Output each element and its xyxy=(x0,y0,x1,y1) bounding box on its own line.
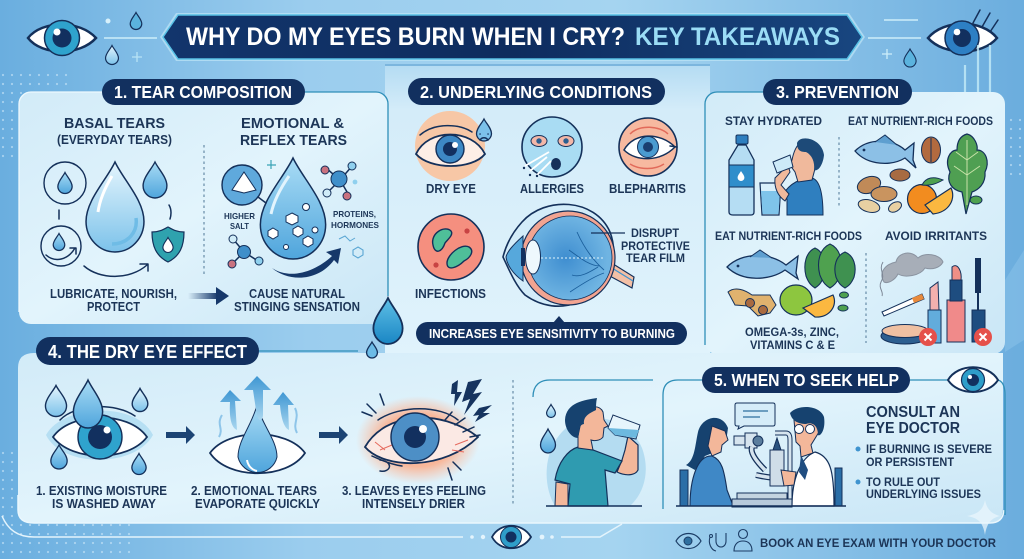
callout line xyxy=(591,232,625,234)
icon: allergies xyxy=(522,117,582,177)
panel: underlying conditions xyxy=(385,65,710,358)
title banner xyxy=(160,13,865,61)
label: avoid irritants: AVOID IRRITANTS xyxy=(885,229,987,243)
illustration: tears evaporate eye xyxy=(210,376,305,473)
bullet: severe or persistent xyxy=(856,442,992,469)
footer icons xyxy=(676,530,752,551)
text: lubricate, nourish, protect: LUBRICATE, NOURISH, xyxy=(50,287,177,301)
text: cause natural stinging sensation xyxy=(234,287,360,314)
illustration: person drinking water xyxy=(541,398,646,506)
label: dry eye: DRY EYE xyxy=(426,182,476,196)
text: cause natural stinging sensation: STINGING SENSATION xyxy=(234,300,360,314)
text: eyes feel drier xyxy=(342,484,486,511)
label: eat nutrient-rich foods 2: EAT NUTRIENT-RICH FOODS xyxy=(715,229,862,243)
diagram: eye anatomy xyxy=(503,204,634,306)
heading: consult an eye doctor: EYE DOCTOR xyxy=(866,420,960,437)
illustration: eye doctor exam xyxy=(676,403,846,507)
connector to tear drop xyxy=(259,350,358,352)
label: allergies: ALLERGIES xyxy=(520,182,584,196)
bullet: severe or persistent: OR PERSISTENT xyxy=(866,455,955,469)
arrow: step 2 to 3 xyxy=(319,426,348,444)
illustration: fish, greens and citrus xyxy=(727,244,855,317)
banner: increases eye sensitivity: INCREASES EYE SENSITIVITY TO BURNING xyxy=(429,327,675,341)
bullet: rule out issues: TO RULE OUT xyxy=(866,475,941,489)
label: proteins, hormones: PROTEINS, xyxy=(333,209,376,219)
panel 5 outline xyxy=(663,380,1005,515)
panel: prevention xyxy=(705,79,1005,354)
label: proteins, hormones xyxy=(331,209,379,230)
icon: infections xyxy=(418,214,484,280)
illustration: emotional tears xyxy=(222,158,363,278)
illustration: fish, nuts and spinach xyxy=(855,134,987,215)
illustration: avoid irritants xyxy=(880,253,992,346)
text: emotional tears evaporate: EVAPORATE QUICKLY xyxy=(195,497,321,511)
heading: emotional and reflex tears: EMOTIONAL & xyxy=(241,116,345,132)
text: omega-3s, zinc, vitamins: VITAMINS C & E xyxy=(750,338,835,352)
banner: increases eye sensitivity xyxy=(416,316,687,345)
callout: disrupt protective tear film: PROTECTIVE xyxy=(621,239,690,253)
icon: footer eye xyxy=(492,526,531,548)
title text: WHY DO MY EYES BURN WHEN I CRY? xyxy=(186,23,625,51)
text: emotional tears evaporate: 2. EMOTIONAL TEARS xyxy=(191,484,317,498)
heading: prevention xyxy=(763,79,912,105)
bullet: rule out issues xyxy=(856,475,981,501)
label: blepharitis: BLEPHARITIS xyxy=(609,182,686,196)
text: omega-3s, zinc, vitamins: OMEGA-3s, ZINC, xyxy=(745,325,839,339)
arrow: basal to emotional xyxy=(188,287,229,305)
text: cause natural stinging sensation: CAUSE NATURAL xyxy=(249,287,345,301)
decoration: sparkle xyxy=(967,500,1000,535)
heading: tear composition: 1. TEAR COMPOSITION xyxy=(114,82,292,102)
label: higher salt: SALT xyxy=(230,221,250,231)
text: existing moisture: 1. EXISTING MOISTURE xyxy=(36,484,167,498)
arrow: step 1 to 2 xyxy=(166,426,195,444)
heading: consult an eye doctor xyxy=(866,404,960,437)
heading: when to seek help xyxy=(702,367,910,393)
title highlight text: KEY TAKEAWAYS xyxy=(635,23,840,51)
callout: disrupt protective tear film: DISRUPT xyxy=(631,226,680,240)
label: stay hydrated: STAY HYDRATED xyxy=(725,114,822,128)
label: eat nutrient-rich foods: EAT NUTRIENT-RICH FOODS xyxy=(848,114,993,128)
left header drops xyxy=(104,12,157,64)
label: infections: INFECTIONS xyxy=(415,287,486,301)
heading: underlying conditions: 2. UNDERLYING CONDITIONS xyxy=(420,82,652,102)
heading: the dry eye effect xyxy=(36,337,259,365)
callout: disrupt protective tear film xyxy=(621,226,690,265)
right header decoration xyxy=(868,20,990,92)
heading: the dry eye effect: 4. THE DRY EYE EFFECT xyxy=(48,342,247,362)
heading: basal tears: (EVERYDAY TEARS) xyxy=(57,133,172,147)
right header eye icon xyxy=(928,10,998,55)
illustration: moisture washed away eye xyxy=(45,380,153,474)
text: eyes feel drier: INTENSELY DRIER xyxy=(362,497,465,511)
heading: consult an eye doctor: CONSULT AN xyxy=(866,404,960,421)
label: higher salt: HIGHER xyxy=(224,211,255,221)
text: emotional tears evaporate xyxy=(191,484,321,511)
text: lubricate, nourish, protect: PROTECT xyxy=(87,300,140,314)
text: existing moisture: IS WASHED AWAY xyxy=(52,497,157,511)
heading: basal tears: BASAL TEARS xyxy=(64,116,165,132)
heading: when to seek help: 5. WHEN TO SEEK HELP xyxy=(714,370,899,390)
footer text: BOOK AN EYE EXAM WITH YOUR DOCTOR xyxy=(760,538,997,550)
bullet: severe or persistent: IF BURNING IS SEVERE xyxy=(866,442,992,456)
text: lubricate, nourish, protect xyxy=(50,287,177,314)
label: proteins, hormones: HORMONES xyxy=(331,220,379,230)
illustration: irritated dry eye xyxy=(356,394,480,484)
callout: disrupt protective tear film: TEAR FILM xyxy=(626,251,685,265)
heading: prevention: 3. PREVENTION xyxy=(776,82,899,102)
illustration: water bottle and glass xyxy=(729,135,781,215)
icon: lightning bolts xyxy=(451,379,492,422)
label: higher salt xyxy=(224,211,255,231)
heading: basal tears xyxy=(57,116,172,147)
panel: lower band xyxy=(18,337,1005,523)
heading: underlying conditions xyxy=(408,78,665,105)
text: omega-3s, zinc, vitamins xyxy=(745,325,839,352)
illustration: person drinking xyxy=(773,138,824,215)
illustration: basal tears xyxy=(41,162,184,276)
heading: emotional and reflex tears: REFLEX TEARS xyxy=(240,133,347,149)
bullet: rule out issues: UNDERLYING ISSUES xyxy=(866,487,981,501)
left header eye icon xyxy=(28,20,96,56)
icon: eye badge xyxy=(948,367,998,392)
text: existing moisture xyxy=(36,484,167,511)
icon: tear drop between panels xyxy=(367,298,403,358)
heading: emotional and reflex tears xyxy=(240,116,347,149)
icon: blepharitis xyxy=(619,118,677,176)
text: eyes feel drier: 3. LEAVES EYES FEELING xyxy=(342,484,486,498)
icon: dry eye xyxy=(415,111,491,181)
panel: tear composition xyxy=(19,79,388,324)
